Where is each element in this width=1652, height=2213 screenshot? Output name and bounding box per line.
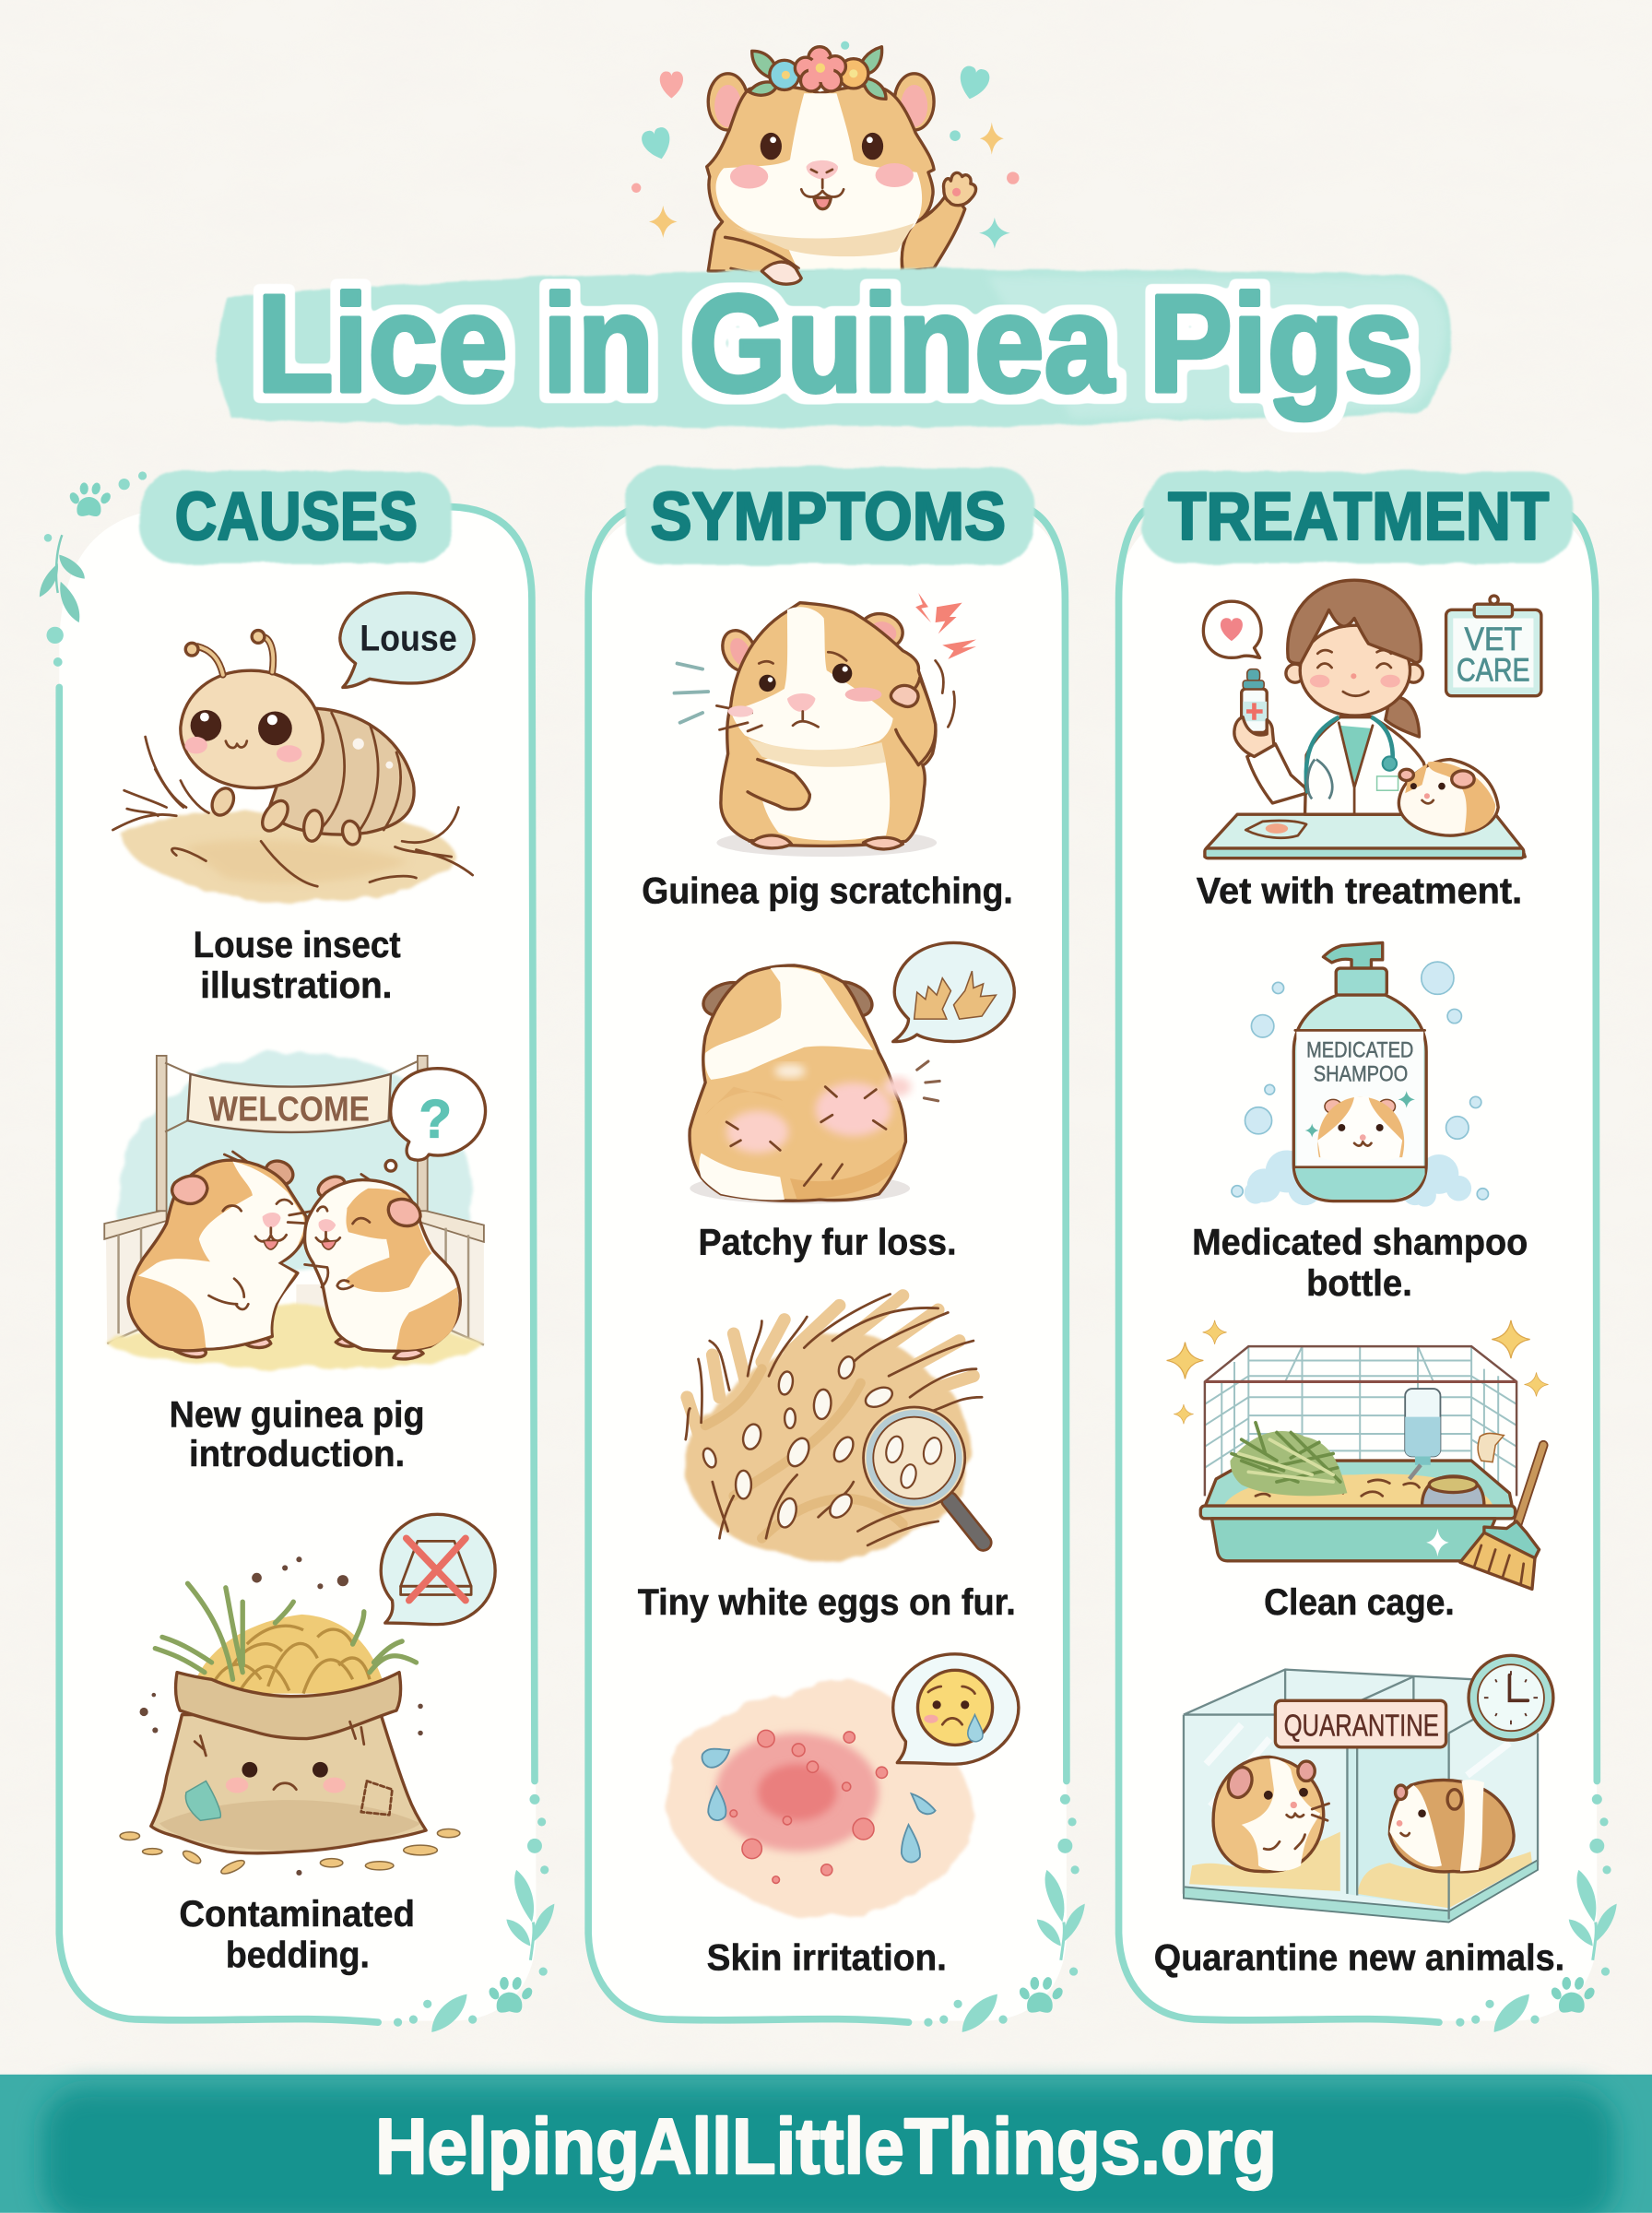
decoration: bottom-right — [1456, 1794, 1617, 2032]
legs — [208, 785, 238, 819]
face white blaze and chest — [716, 93, 922, 271]
illustration: clean cage — [1167, 1320, 1549, 1589]
caption — [1192, 1223, 1528, 1304]
footer url: HelpingAllLittleThings.org — [375, 2102, 1277, 2191]
magnifying glass — [864, 1407, 984, 1543]
label guinea pig — [1317, 1096, 1404, 1163]
head — [1286, 664, 1304, 682]
tray — [1205, 1461, 1512, 1508]
small guinea pig on table — [1398, 760, 1498, 835]
illustration: quarantine — [1184, 1655, 1553, 1923]
caption: illustration. — [200, 965, 392, 1006]
caption: Medicated shampoo — [1192, 1223, 1528, 1263]
caption: Tiny white eggs on fur. — [638, 1582, 1016, 1623]
sign: vet care clipboard: VET — [1464, 621, 1522, 657]
illustration: skin irritation — [666, 1654, 1019, 1917]
caption — [170, 1394, 425, 1474]
illustration: medicated shampoo bottle: SHAMPOO — [1314, 1062, 1408, 1086]
illustration: vet with treatment — [1203, 580, 1541, 858]
bubbles — [1232, 962, 1488, 1200]
debris — [120, 1829, 460, 1876]
body — [268, 708, 414, 834]
panel: causes — [40, 470, 554, 2032]
food bowl — [1422, 1476, 1484, 1506]
head — [181, 670, 323, 788]
panel: symptoms — [588, 467, 1085, 2032]
glass enclosure — [1184, 1670, 1538, 1919]
caption: Guinea pig scratching. — [642, 871, 1013, 912]
illustration: contaminated bedding sack — [120, 1514, 495, 1876]
caption — [194, 925, 401, 1006]
left arm and paw — [726, 237, 801, 284]
quarantine sign — [1275, 1700, 1446, 1747]
illustration: louse insect on hay — [112, 593, 474, 904]
welcome sign: WELCOME — [208, 1089, 370, 1129]
waving arm — [902, 189, 965, 271]
tray body — [1200, 1506, 1516, 1519]
sack — [151, 1715, 426, 1853]
title: Lice in Guinea Pigs — [257, 266, 1413, 420]
caption: bottle. — [1306, 1263, 1412, 1304]
welcome sign — [165, 1061, 418, 1132]
callout: no wood shavings — [381, 1514, 495, 1625]
thought bubble with question mark: ? — [419, 1090, 452, 1150]
caption: Contaminated — [179, 1894, 415, 1935]
bottle label text: MEDICATED — [1306, 1038, 1413, 1062]
caption: New guinea pig — [170, 1394, 425, 1435]
caption: Skin irritation. — [707, 1938, 947, 1979]
clock — [1469, 1655, 1553, 1740]
wire cage — [1205, 1346, 1516, 1496]
foam — [1245, 1150, 1471, 1207]
quarantine sign: QUARANTINE — [1284, 1710, 1439, 1744]
sparkles — [1167, 1320, 1549, 1424]
stain — [1478, 1433, 1504, 1462]
fence — [104, 1210, 484, 1345]
sign: vet care clipboard — [1446, 596, 1541, 696]
decoration: bottom-right — [924, 1794, 1085, 2032]
hay — [191, 1615, 386, 1694]
illustration: new guinea pig introduction — [104, 1051, 486, 1368]
coat — [1305, 717, 1439, 814]
bottle — [1323, 942, 1383, 968]
heading banner: causes: CAUSES — [175, 479, 418, 554]
face — [761, 133, 782, 160]
right guinea pig — [1389, 1780, 1514, 1872]
caption: Vet with treatment. — [1197, 871, 1522, 912]
caption: introduction. — [189, 1434, 405, 1474]
paw resting on banner — [761, 262, 801, 284]
heading banner: symptoms: SYMPTOMS — [650, 479, 1006, 554]
mascot: waving guinea pig with flower crown — [631, 41, 1020, 284]
illustration: guinea pig scratching — [674, 593, 976, 857]
hay pile — [1230, 1423, 1347, 1496]
footer band — [0, 2075, 1652, 2213]
ponytail — [1386, 697, 1419, 737]
decoration: bottom-right — [394, 1794, 554, 2032]
heading banner: treatment: TREATMENT — [1168, 479, 1549, 554]
bald patches — [726, 1111, 788, 1154]
eggs — [701, 1355, 895, 1530]
water bottle — [1405, 1389, 1440, 1479]
dropper bottle and hand — [1234, 669, 1274, 756]
callout: sad face — [893, 1654, 1019, 1764]
ears — [708, 74, 748, 130]
callout: Louse: Louse — [360, 619, 457, 659]
callout: Louse — [340, 593, 474, 687]
heart callout — [1203, 601, 1261, 657]
panel: treatment — [1119, 471, 1617, 2032]
sparkles and hearts around mascot — [631, 41, 1020, 249]
caption: Quarantine new animals. — [1154, 1938, 1564, 1979]
illustration: patchy fur loss — [690, 942, 1014, 1204]
table — [1205, 814, 1525, 857]
caption: Clean cage. — [1264, 1582, 1455, 1623]
thought bubble with question mark — [385, 1069, 486, 1171]
scratch marks — [915, 593, 976, 659]
left guinea pig — [128, 1152, 313, 1357]
right guinea pig — [305, 1173, 460, 1359]
left guinea pig — [1213, 1757, 1329, 1872]
hair — [1288, 580, 1421, 663]
body and head silhouette — [707, 86, 934, 271]
caption: bedding. — [226, 1935, 370, 1975]
illustration: medicated shampoo bottle — [1232, 942, 1488, 1207]
caption: Louse insect — [194, 925, 401, 965]
decoration: top-left paw and leaf — [40, 471, 147, 667]
scratching arm — [896, 678, 936, 765]
title banner — [218, 262, 1452, 428]
caption — [179, 1894, 415, 1975]
callout: broken fur — [893, 942, 1014, 1042]
illustration: tiny white eggs on fur — [685, 1295, 984, 1559]
caption: Patchy fur loss. — [699, 1223, 957, 1263]
broom — [1460, 1445, 1543, 1589]
flower crown — [749, 47, 886, 99]
sign: vet care clipboard: CARE — [1457, 653, 1530, 689]
